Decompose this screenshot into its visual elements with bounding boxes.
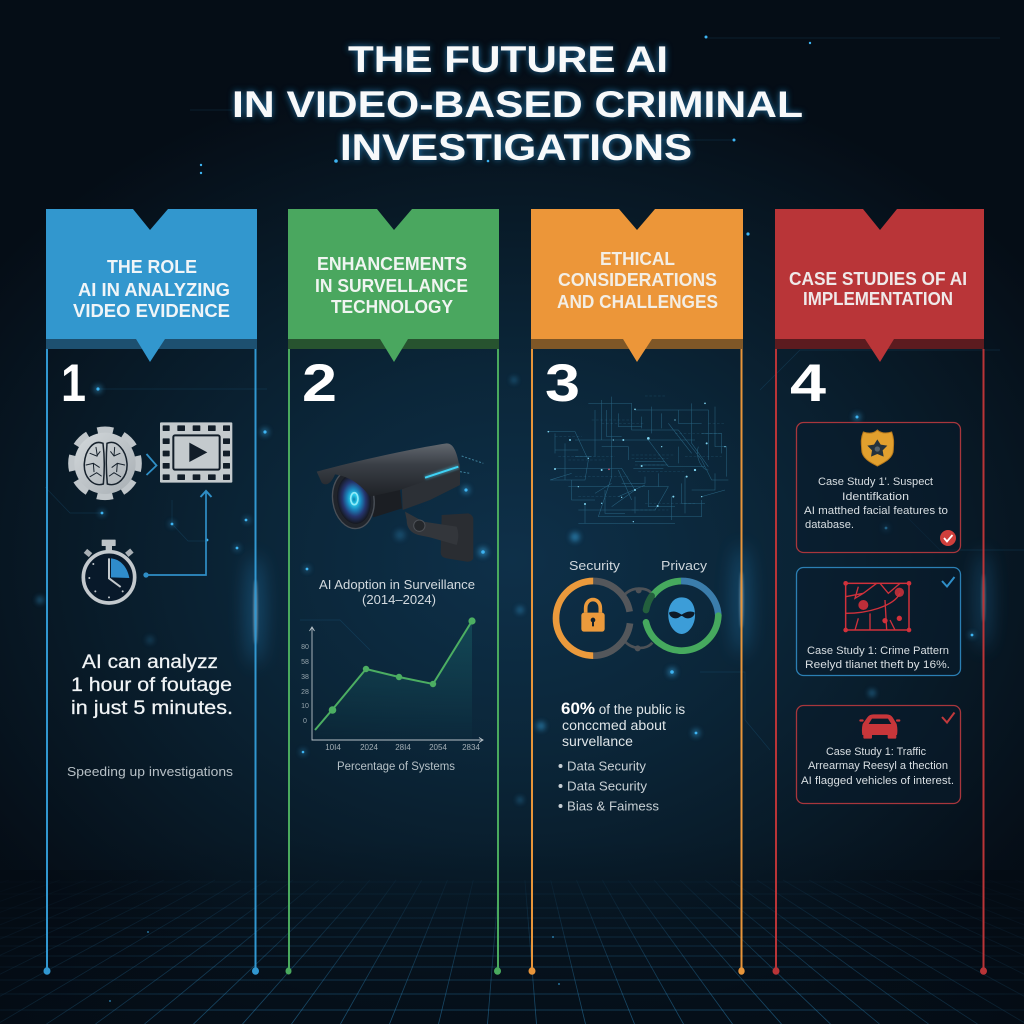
perspective floor grid: [0, 880, 1024, 1024]
panel 4 side rails: [772, 349, 987, 975]
panel 2 header banner: [288, 209, 499, 362]
stat text: analysis speed: in just 5 minutes.: [71, 698, 233, 719]
card: suspect identification: database.: [805, 519, 854, 531]
card: suspect identification: [796, 422, 960, 552]
panel 3 header banner: AND CHALLENGES: [557, 292, 718, 312]
card: crime pattern: Reelyd tlianet theft by 16%.: [805, 659, 950, 671]
stat text: public concern: [561, 699, 685, 749]
line chart: adoption: 38: [301, 674, 309, 681]
panel 2 header banner: IN SURVELLANCE: [315, 276, 468, 296]
line chart: adoption: 2834: [462, 743, 480, 752]
card: traffic: Case Study 1: Traffic: [826, 746, 926, 758]
label: privacy: Privacy: [661, 558, 708, 573]
stat text: public concern: 60% of the public is: [561, 699, 685, 718]
caption: speeding up investigations: Speeding up investigations: [67, 764, 234, 779]
panel 2 side rails: [286, 349, 501, 975]
stat text: analysis speed: [71, 652, 233, 719]
line chart: adoption: 28I4: [395, 743, 411, 752]
stat text: analysis speed: AI can analyzz: [82, 652, 218, 673]
chart caption: Percentage of Systems: [337, 761, 455, 773]
panel 3 header banner: [531, 209, 743, 362]
card: crime pattern: Case Study 1: Crime Pattern: [807, 645, 949, 657]
line chart: adoption: [301, 617, 483, 752]
panel 2 header banner: TECHNOLOGY: [331, 297, 453, 317]
arrow: time to video: [144, 491, 212, 577]
card: traffic: AI flagged vehicles of interest.: [801, 775, 954, 787]
title: INVESTIGATIONS: [340, 127, 692, 168]
panel 1 number: 1: [61, 354, 86, 413]
line chart: adoption: 28: [301, 689, 309, 696]
chart title: (2014–2024): [362, 592, 436, 607]
network data map: [547, 396, 728, 523]
line chart: adoption: 80: [301, 644, 309, 651]
card: suspect identification: Identifkation: [842, 491, 909, 503]
panel 2 number: 2: [302, 354, 337, 413]
card: suspect identification: Case Study 1'. Suspect: [818, 476, 933, 488]
chart title: AI Adoption in Surveillance: [319, 577, 475, 592]
icon: check badge: [940, 530, 956, 546]
bullet list: concerns: Data Security: [567, 778, 647, 794]
title: IN VIDEO-BASED CRIMINAL: [232, 84, 803, 125]
panel 3 number: 3: [545, 354, 580, 413]
title: [232, 39, 803, 168]
panel 1: role of AI in analyzing video: [44, 209, 259, 975]
bullet list: concerns: [558, 758, 659, 814]
line chart: adoption: 58: [301, 659, 309, 666]
icon: police badge: [861, 430, 894, 466]
card: crime pattern: [796, 568, 960, 676]
panel 4 number: 4: [790, 354, 827, 413]
panel 4 header banner: [775, 209, 984, 362]
panel 3: ethical considerations: [528, 209, 745, 975]
bullet list: concerns: Bias & Faimess: [567, 798, 659, 814]
icon: crime map: [843, 581, 911, 632]
panel 3 header banner: ETHICAL: [600, 249, 675, 269]
icon: car: [859, 714, 900, 739]
panel 1 header banner: VIDEO EVIDENCE: [73, 301, 230, 321]
panel 2 header banner: ENHANCEMENTS: [317, 254, 467, 274]
icon: surveillance camera: [317, 443, 483, 562]
stat text: public concern: survellance: [562, 734, 633, 749]
grid edge vignette: [0, 870, 1024, 1024]
panel 1 header banner: THE ROLE: [107, 257, 197, 277]
card: suspect identification: AI matthed facial features to: [804, 505, 948, 517]
bullet list: concerns: Data Security: [567, 758, 646, 774]
linked rings: security and privacy: [556, 581, 718, 656]
panel 1 side rails: [44, 349, 259, 975]
panel 1 header banner: AI IN ANALYZING: [78, 280, 230, 300]
panel 3 header banner: CONSIDERATIONS: [558, 270, 717, 290]
icon: blue check: [942, 577, 954, 586]
line chart: adoption: 0: [303, 718, 307, 725]
panel 4: case studies: [772, 209, 987, 975]
panel 3 side rails: [528, 349, 745, 975]
icon: chevron connector: [146, 454, 156, 475]
card: traffic: Arrearmay Reesyl a thection: [808, 760, 948, 772]
stat text: analysis speed: 1 hour of foutage: [71, 675, 232, 696]
line chart: adoption: 10I4: [325, 743, 341, 752]
panel 1 header banner: [46, 209, 257, 362]
card: traffic: [796, 706, 960, 804]
panel 4 header banner: IMPLEMENTATION: [803, 289, 953, 309]
line chart: adoption: 2054: [429, 743, 447, 752]
icon: AI brain gear: [73, 431, 137, 496]
stat text: public concern: conccmed about: [562, 718, 666, 733]
icon: video film frame: [160, 422, 232, 483]
title: THE FUTURE AI: [348, 39, 668, 80]
chart title: [319, 577, 475, 607]
icon: red check: [942, 712, 954, 722]
panel 4 header banner: CASE STUDIES OF AI: [789, 269, 967, 289]
line chart: adoption: 10: [301, 703, 309, 710]
icon: stopwatch: [83, 540, 135, 603]
line chart: adoption: 2024: [360, 743, 378, 752]
panel 2: enhancements in surveillance: [286, 209, 501, 975]
label: security: Security: [569, 558, 621, 573]
